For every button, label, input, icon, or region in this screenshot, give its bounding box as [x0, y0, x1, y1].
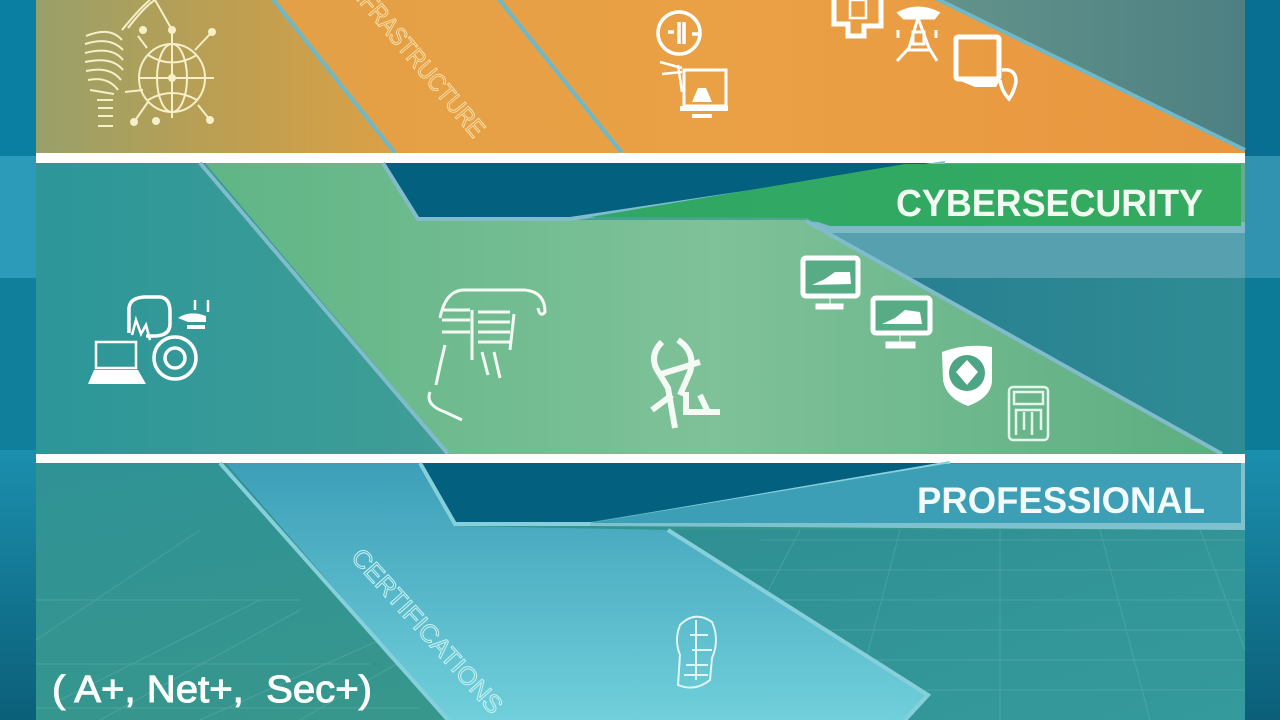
- icon: chat, laptop and at sign: [88, 297, 208, 384]
- icon: monitor with speed lines: [660, 62, 728, 118]
- icon: monitor with pin: [956, 37, 1016, 99]
- divider: top: [36, 153, 1245, 163]
- icon: sketch figure with flower: [652, 340, 720, 428]
- faint wireframe grid: [36, 530, 1245, 720]
- icon: sketch head: [677, 617, 716, 688]
- blue main body: [226, 463, 928, 720]
- icon: sketch figure at desk: [429, 290, 545, 420]
- heading banner: cybersecurity: CYBERSECURITY: [896, 183, 1203, 225]
- heading banner: professional: PROFESSIONAL: [917, 480, 1205, 521]
- heading banner: professional: [590, 463, 1245, 530]
- divider: middle: [36, 454, 1245, 463]
- icon: signal tower and globe network: [85, 0, 215, 126]
- icon: broadcast tower: [897, 8, 938, 61]
- heading banner: cybersecurity: [590, 164, 1241, 226]
- panel: cybersecurity tier: [36, 163, 1245, 454]
- icon: monitor one: [803, 258, 858, 309]
- icon: shield: [942, 346, 992, 406]
- icon: server card: [1009, 387, 1048, 440]
- certifications text: ( A+, Net+, Sec+): [52, 669, 372, 711]
- icon: gauge: [658, 12, 700, 54]
- dark teal notch: [383, 163, 945, 219]
- panel: professional tier: [36, 463, 1245, 720]
- icon: monitor top: [834, 0, 881, 36]
- panel: infrastructure tier: [36, 0, 1245, 153]
- icon: monitor two: [873, 298, 930, 348]
- dark teal notch: [420, 463, 950, 522]
- green main body: [205, 163, 1222, 454]
- diagonal label: certifications: CERTIFICATIONS: [346, 543, 508, 720]
